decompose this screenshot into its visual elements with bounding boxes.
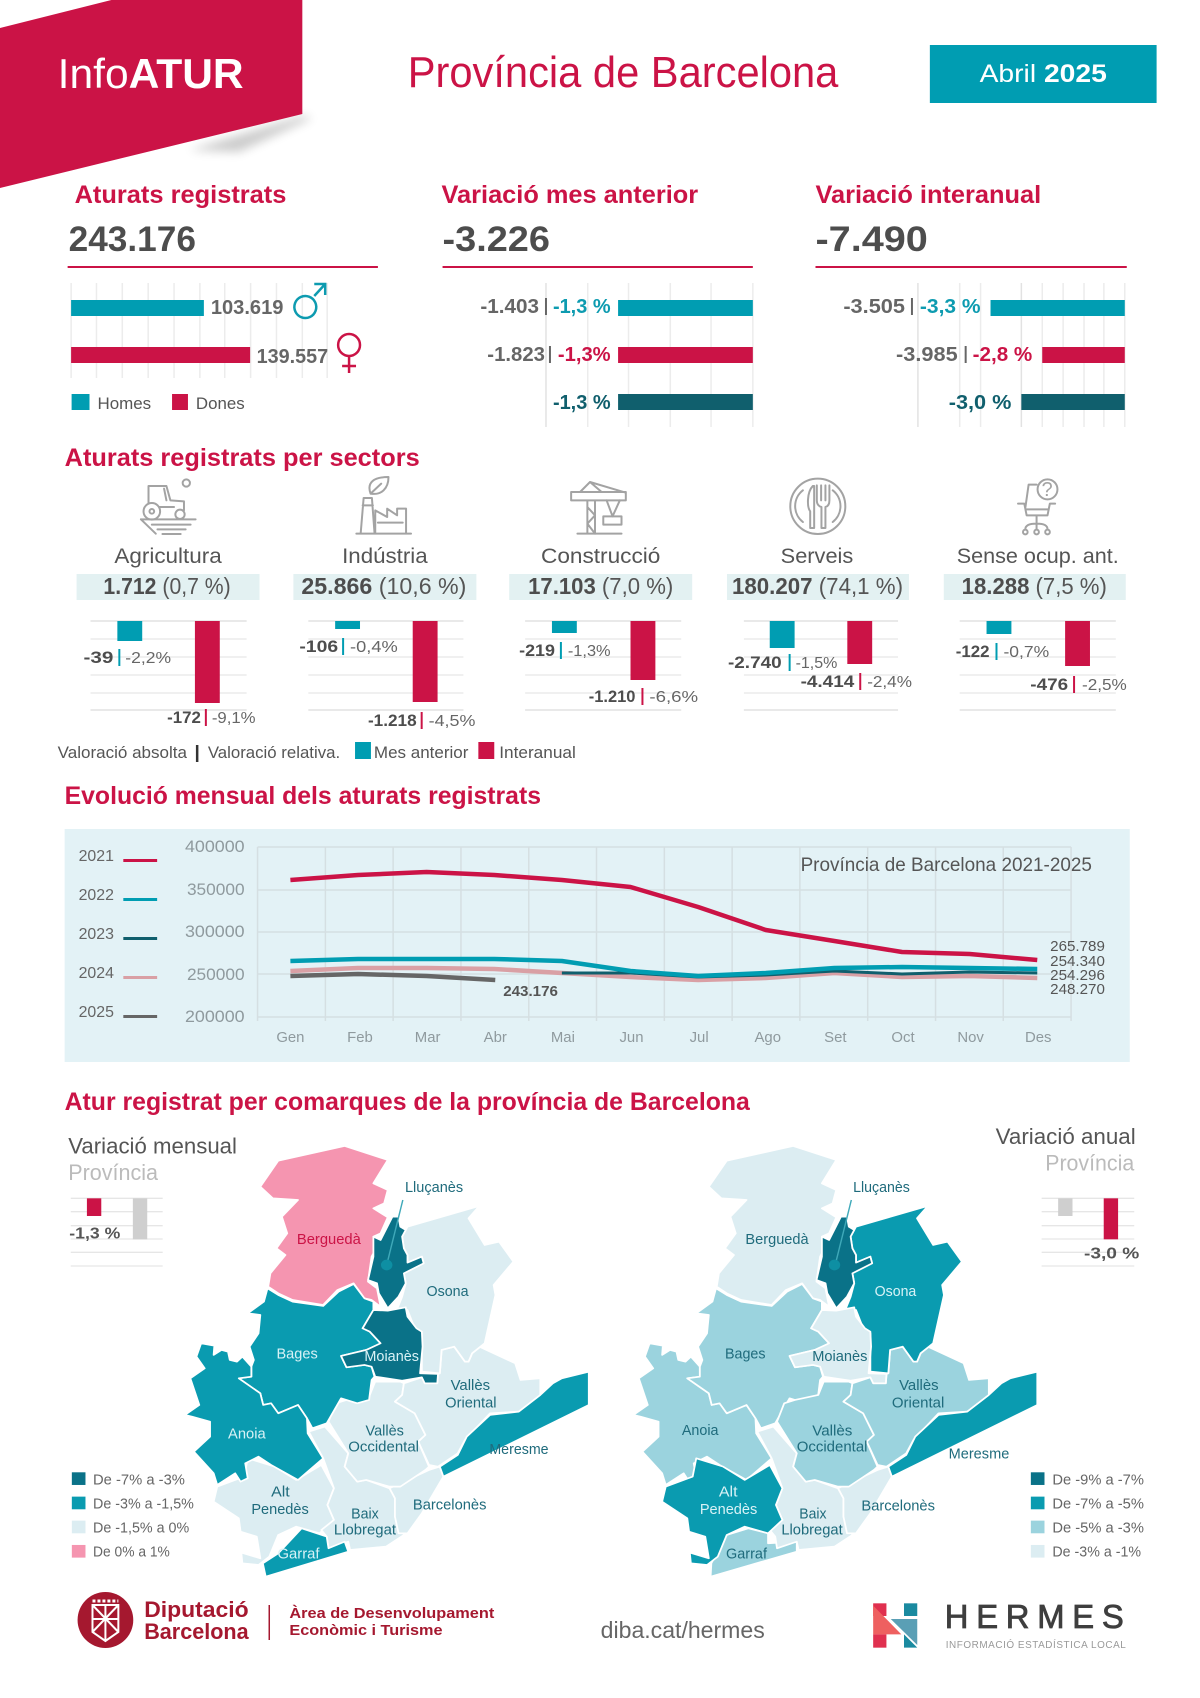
panel: variació mensual header: Província bbox=[68, 1160, 158, 1185]
end values bbox=[1050, 938, 1105, 998]
department line 2: Econòmic i Turisme bbox=[289, 1622, 443, 1639]
sector legend: Interanual bbox=[499, 743, 576, 762]
value: 18.288 (7,5 %) bbox=[962, 573, 1107, 599]
brand title: InfoATUR bbox=[58, 50, 244, 97]
Garraf bbox=[263, 1528, 348, 1577]
panel: serveis bbox=[727, 479, 912, 710]
Alt Penedès bbox=[662, 1458, 782, 1565]
region labels: Penedès bbox=[700, 1501, 757, 1518]
values: -219 bbox=[519, 641, 555, 660]
icon: tractor bbox=[141, 479, 196, 534]
bar mes anterior bbox=[552, 621, 577, 633]
region labels: Penedès bbox=[251, 1501, 309, 1518]
icon: crane bbox=[571, 482, 626, 534]
header banner bbox=[0, 0, 302, 188]
icon: plate and cutlery bbox=[790, 479, 845, 534]
value label 2025: 243.176 bbox=[503, 983, 558, 1000]
bar total bbox=[618, 394, 753, 410]
region labels: Osona bbox=[875, 1283, 917, 1300]
row labels: -1.823 bbox=[487, 344, 545, 366]
year legend: 2025 bbox=[79, 1004, 114, 1021]
region labels: Anoia bbox=[228, 1426, 266, 1442]
Baix Llobregat bbox=[309, 1427, 404, 1550]
row labels bbox=[480, 296, 611, 414]
icon: male bbox=[314, 284, 325, 296]
footer: url: diba.cat/hermes bbox=[601, 1617, 765, 1643]
label: Agricultura bbox=[114, 545, 222, 568]
Vallès Oriental bbox=[843, 1347, 989, 1467]
y axis labels: 300000 bbox=[185, 922, 245, 941]
region labels: Occidental bbox=[348, 1439, 419, 1455]
total value: 243.176 bbox=[69, 220, 196, 259]
year legend: 2024 bbox=[79, 965, 114, 982]
heading: Variació mes anterior bbox=[442, 181, 698, 209]
value: 25.866 (10,6 %) bbox=[301, 573, 466, 599]
x axis labels bbox=[276, 1029, 1052, 1046]
row labels: -1,3 % bbox=[553, 392, 611, 414]
values: -1.210 bbox=[589, 687, 635, 706]
Berguedà bbox=[709, 1146, 836, 1307]
x axis labels: Oct bbox=[891, 1029, 915, 1046]
region labels: Vallès bbox=[365, 1423, 404, 1439]
values: -2,5% bbox=[1082, 677, 1127, 694]
value box bbox=[727, 574, 909, 600]
region labels: Alt bbox=[271, 1484, 290, 1500]
values: -4.414 bbox=[801, 672, 855, 691]
bar mes anterior bbox=[335, 621, 360, 629]
Garraf bbox=[711, 1528, 797, 1577]
value dones: 139.557 bbox=[257, 346, 328, 368]
y axis labels bbox=[185, 837, 245, 1026]
panel: variació anual header: -3,0 % bbox=[1084, 1245, 1140, 1262]
Moianès bbox=[790, 1307, 887, 1383]
value: 180.207 (74,1 %) bbox=[732, 573, 903, 599]
tagline: INFORMACIÓ ESTADÍSTICA LOCAL bbox=[946, 1640, 1126, 1651]
value homes: 103.619 bbox=[211, 297, 283, 319]
map legend: De -1,5% a 0% bbox=[93, 1520, 189, 1536]
region labels: Moianès bbox=[364, 1348, 419, 1365]
heading: Variació interanual bbox=[815, 181, 1041, 209]
values: -1.218 bbox=[368, 711, 417, 730]
values: -6,6% bbox=[649, 689, 698, 706]
panel: construcció bbox=[509, 482, 698, 710]
values: -2,2% bbox=[125, 650, 171, 667]
values bbox=[519, 641, 698, 706]
Vallès Oriental bbox=[395, 1347, 540, 1467]
values bbox=[84, 648, 256, 727]
legend: Dones bbox=[196, 394, 245, 413]
values: -4,5% bbox=[429, 713, 475, 730]
upper content bbox=[0, 0, 1157, 1116]
value: 17.103 (7,0 %) bbox=[528, 573, 673, 599]
value box bbox=[293, 574, 476, 600]
Anoia bbox=[633, 1343, 772, 1485]
legend bbox=[72, 394, 245, 413]
end values: 248.270 bbox=[1050, 981, 1105, 998]
value box bbox=[77, 574, 260, 600]
end values: 254.340 bbox=[1050, 953, 1105, 970]
footer: Hermes logo bbox=[873, 1598, 1126, 1651]
Bages bbox=[239, 1284, 381, 1428]
crest bbox=[78, 1592, 133, 1648]
Lluçanès pointer bbox=[829, 1200, 851, 1270]
values: -2.740 bbox=[728, 653, 782, 672]
line 2024 bbox=[290, 968, 1037, 980]
panel: variació anual header: Província bbox=[1045, 1150, 1135, 1175]
x axis labels: Feb bbox=[347, 1029, 373, 1046]
region labels: Anoia bbox=[682, 1422, 719, 1439]
region labels: Moianès bbox=[812, 1348, 868, 1365]
Vallès Occidental bbox=[777, 1382, 878, 1487]
value box bbox=[509, 574, 692, 600]
region labels: Oriental bbox=[892, 1395, 944, 1411]
row labels: -1,3% bbox=[558, 344, 611, 366]
row labels: -1,3 % bbox=[553, 296, 611, 318]
label: Sense ocup. ant. bbox=[957, 545, 1119, 568]
region labels: Llobregat bbox=[781, 1522, 843, 1538]
male circle bbox=[291, 293, 319, 321]
department: Àrea de Desenvolupament bbox=[289, 1605, 494, 1622]
x axis labels: Gen bbox=[276, 1029, 304, 1046]
year legend: 2021 bbox=[79, 848, 114, 865]
map legend: variació anual: De -5% a -3% bbox=[1052, 1520, 1144, 1536]
bar homes bbox=[71, 300, 204, 316]
Barcelonès bbox=[390, 1467, 443, 1533]
values: -476 bbox=[1030, 675, 1068, 694]
region labels: Llobregat bbox=[334, 1522, 397, 1538]
Baix Llobregat bbox=[757, 1427, 852, 1550]
label: Serveis bbox=[781, 545, 853, 568]
icon: female bbox=[338, 334, 360, 373]
sector legend: Valoració absolta bbox=[58, 743, 188, 762]
panel: indústria bbox=[293, 477, 476, 730]
region labels: Bages bbox=[725, 1346, 766, 1362]
sector legend bbox=[58, 742, 576, 762]
value: 1.712 (0,7 %) bbox=[103, 573, 231, 599]
Osona bbox=[845, 1206, 962, 1373]
Lluçanès bbox=[817, 1217, 872, 1308]
heading: sectors: Aturats registrats per sectors bbox=[65, 444, 420, 472]
sector legend: Mes anterior bbox=[374, 743, 469, 762]
header bbox=[0, 0, 1157, 188]
region labels: Osona bbox=[427, 1283, 469, 1300]
region labels bbox=[228, 1179, 549, 1562]
region labels: Bages bbox=[276, 1346, 318, 1362]
x axis labels: Mai bbox=[551, 1029, 575, 1046]
Bages bbox=[687, 1284, 829, 1428]
region labels: Barcelonès bbox=[413, 1497, 487, 1513]
map: variació anual bbox=[633, 1146, 1037, 1577]
line 2022 bbox=[290, 959, 1037, 976]
region labels: Berguedà bbox=[297, 1231, 361, 1248]
panel: variació anual header: Variació anual bbox=[996, 1124, 1136, 1149]
Osona bbox=[397, 1206, 513, 1373]
total value: -3.226 bbox=[443, 220, 550, 259]
year legend: 2023 bbox=[79, 926, 114, 943]
footer: Diputació logo bbox=[78, 1592, 494, 1648]
Lluçanès pointer bbox=[381, 1200, 403, 1270]
region labels: Garraf bbox=[726, 1546, 768, 1562]
label: Indústria bbox=[342, 545, 428, 568]
Alt Penedès bbox=[214, 1458, 334, 1565]
bar dones bbox=[1042, 347, 1125, 363]
region labels: Lluçanès bbox=[853, 1179, 910, 1196]
region labels: Meresme bbox=[489, 1441, 549, 1458]
x axis labels: Des bbox=[1025, 1029, 1052, 1046]
x axis labels: Set bbox=[824, 1029, 847, 1046]
x axis labels: Nov bbox=[957, 1029, 984, 1046]
row labels: -1.403 bbox=[480, 296, 539, 318]
sector legend: Valoració relativa. bbox=[208, 743, 340, 762]
line 2023 bbox=[562, 971, 1037, 977]
bar interanual bbox=[847, 621, 872, 664]
heading: Aturats registrats bbox=[75, 181, 286, 209]
values: -1,3% bbox=[568, 643, 611, 660]
values: -9,1% bbox=[212, 710, 256, 727]
values bbox=[956, 642, 1127, 694]
y axis labels: 200000 bbox=[185, 1007, 245, 1026]
region labels: Baix bbox=[351, 1506, 379, 1522]
footer bbox=[78, 1592, 1126, 1651]
map legend: variació anual bbox=[1031, 1472, 1144, 1560]
values bbox=[299, 637, 475, 730]
panel: variació mensual header bbox=[68, 1133, 237, 1266]
panel: sense ocupació anterior bbox=[944, 479, 1127, 710]
line 2025 bbox=[290, 974, 495, 980]
region labels: Barcelonès bbox=[861, 1498, 935, 1514]
row labels: -3.505 bbox=[843, 296, 905, 318]
region labels: Baix bbox=[799, 1506, 827, 1522]
row labels: -3.985 bbox=[896, 344, 958, 366]
map legend: De -3% a -1,5% bbox=[93, 1496, 194, 1512]
bar mes anterior bbox=[987, 621, 1011, 634]
value box bbox=[944, 574, 1126, 600]
total value: -7.490 bbox=[815, 220, 928, 259]
year legend bbox=[79, 848, 157, 1021]
organisation name line 2: Barcelona bbox=[144, 1619, 249, 1644]
Moianès bbox=[341, 1307, 438, 1383]
main title: Província de Barcelona bbox=[408, 48, 839, 97]
bar homes bbox=[991, 300, 1125, 316]
values: -122 bbox=[956, 642, 990, 661]
logo mark bbox=[873, 1603, 917, 1648]
map legend: De -7% a -3% bbox=[93, 1472, 185, 1488]
region labels: Vallès bbox=[451, 1377, 490, 1394]
row labels: -2,8 % bbox=[973, 344, 1033, 366]
map legend bbox=[72, 1472, 194, 1560]
organisation name: Diputació bbox=[144, 1597, 249, 1622]
end values: 254.296 bbox=[1050, 967, 1105, 984]
y axis labels: 350000 bbox=[187, 880, 245, 899]
region labels: Vallès bbox=[899, 1377, 939, 1394]
row labels: -3,3 % bbox=[920, 296, 981, 318]
Maresme bbox=[440, 1372, 589, 1477]
label: Construcció bbox=[541, 545, 660, 568]
panel: variació anual header bbox=[996, 1124, 1140, 1266]
x axis labels: Mar bbox=[415, 1029, 440, 1046]
region labels: Berguedà bbox=[745, 1231, 809, 1248]
row labels bbox=[843, 296, 1033, 414]
map: variació mensual bbox=[72, 1146, 589, 1577]
bar dones bbox=[71, 347, 250, 363]
bar mes anterior bbox=[117, 621, 142, 641]
year legend: 2022 bbox=[79, 887, 114, 904]
y axis labels: 250000 bbox=[187, 965, 245, 984]
panel: variació mensual header: Variació mensual bbox=[68, 1133, 237, 1158]
bar interanual bbox=[413, 621, 438, 702]
values: -0,4% bbox=[350, 639, 398, 656]
wordmark: HERMES bbox=[945, 1598, 1124, 1635]
Barcelonès bbox=[838, 1467, 892, 1533]
bar homes bbox=[618, 300, 753, 316]
question mark: ? bbox=[1042, 479, 1053, 501]
row labels: -3,0 % bbox=[949, 392, 1012, 414]
date box bbox=[930, 45, 1157, 103]
values: -106 bbox=[299, 637, 338, 656]
panel: agricultura bbox=[77, 479, 260, 727]
legend: Homes bbox=[97, 394, 151, 413]
panel: variació interanual bbox=[815, 181, 1127, 427]
region labels bbox=[682, 1179, 1009, 1562]
bar mes anterior bbox=[770, 621, 795, 648]
bar interanual bbox=[195, 621, 220, 703]
y axis labels: 400000 bbox=[185, 837, 245, 856]
values: -1,5% bbox=[796, 655, 837, 672]
map legend: variació anual: De -7% a -5% bbox=[1052, 1496, 1144, 1512]
values: -39 bbox=[84, 648, 113, 667]
region labels: Meresme bbox=[949, 1446, 1009, 1462]
map legend: variació anual: De -9% a -7% bbox=[1052, 1472, 1144, 1488]
region labels: Garraf bbox=[278, 1546, 320, 1562]
panel: variació mensual header: -1,3 % bbox=[69, 1225, 121, 1242]
region labels: Lluçanès bbox=[405, 1179, 463, 1196]
region labels: Alt bbox=[719, 1484, 738, 1500]
end values: 265.789 bbox=[1050, 938, 1105, 955]
bar total bbox=[1021, 394, 1125, 410]
values: -2,4% bbox=[867, 674, 912, 691]
values: -0,7% bbox=[1003, 644, 1049, 661]
panel: variació mes anterior bbox=[442, 181, 753, 427]
map legend: variació anual: De -3% a -1% bbox=[1052, 1544, 1141, 1560]
values bbox=[728, 653, 912, 691]
x axis labels: Jun bbox=[619, 1029, 644, 1046]
chart subtitle: Província de Barcelona 2021-2025 bbox=[801, 855, 1092, 876]
values: -172 bbox=[167, 708, 201, 727]
x axis labels: Ago bbox=[754, 1029, 781, 1046]
heading: evolució: Evolució mensual dels aturats registrats bbox=[65, 782, 541, 810]
line 2021 bbox=[290, 872, 1037, 960]
region labels: Occidental bbox=[797, 1439, 867, 1455]
date text: Abril 2025 bbox=[980, 60, 1107, 88]
panel: aturats registrats bbox=[68, 181, 378, 413]
bar dones bbox=[618, 347, 753, 363]
region labels: Oriental bbox=[445, 1395, 497, 1411]
Lluçanès bbox=[368, 1217, 424, 1308]
Maresme bbox=[888, 1372, 1037, 1477]
icon: office chair bbox=[1018, 479, 1057, 534]
line chart panel bbox=[65, 829, 1130, 1062]
bar interanual bbox=[631, 621, 655, 680]
region labels: Vallès bbox=[812, 1423, 853, 1439]
Vallès Occidental bbox=[329, 1382, 429, 1487]
map legend: De 0% a 1% bbox=[93, 1544, 170, 1560]
x axis labels: Jul bbox=[690, 1029, 709, 1046]
heading: comarques: Atur registrat per comarques de la província de Barcelona bbox=[65, 1088, 751, 1116]
Anoia bbox=[185, 1343, 323, 1485]
icon: factory bbox=[356, 477, 411, 534]
Berguedà bbox=[260, 1146, 388, 1307]
bar interanual bbox=[1065, 621, 1090, 666]
x axis labels: Abr bbox=[484, 1029, 507, 1046]
